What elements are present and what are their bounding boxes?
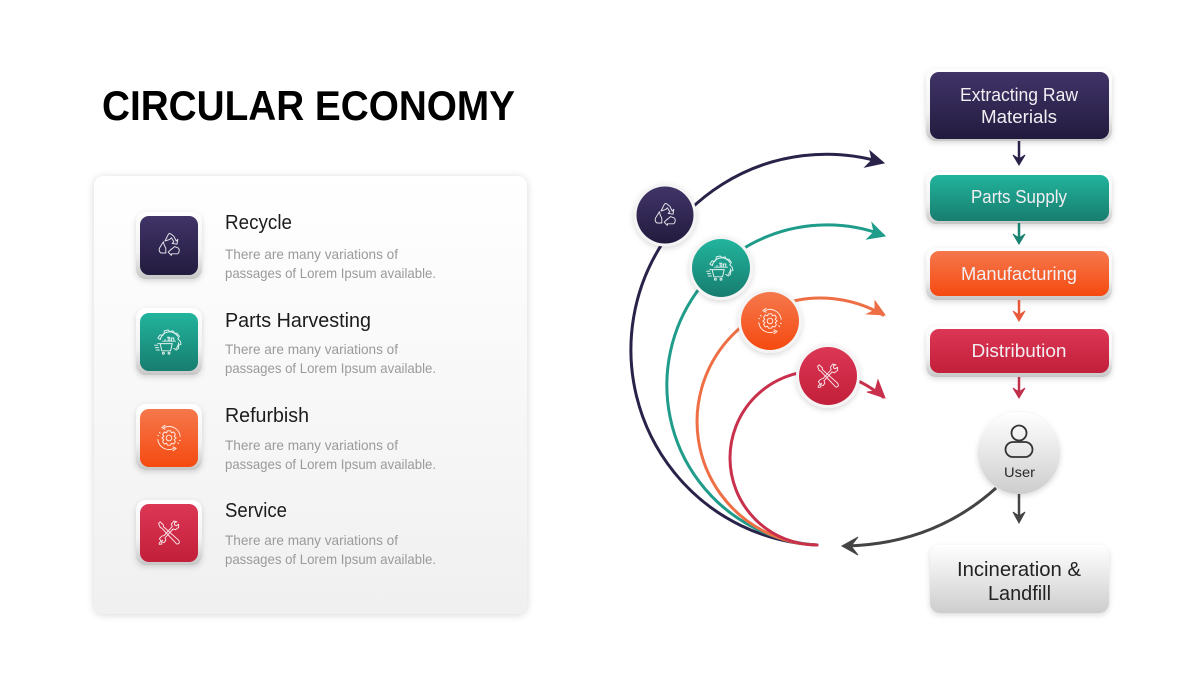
arrow: user to landfill xyxy=(1013,494,1025,523)
legend item: Recycle xyxy=(136,212,436,281)
legend item: Refurbish xyxy=(136,404,436,472)
flow box: Incineration and Landfill: Landfill xyxy=(988,583,1051,605)
flow box: Incineration and Landfill: Incineration & xyxy=(957,559,1082,581)
legend item: Parts Harvesting xyxy=(136,308,436,376)
arrow: parts supply to manufacturing xyxy=(1013,223,1025,244)
arrow: user back to loop xyxy=(842,488,996,555)
legend item: Parts Harvesting: Parts Harvesting xyxy=(225,310,371,332)
legend item: Recycle: Recycle xyxy=(225,212,292,234)
arc: red service loop xyxy=(730,371,885,545)
node: refurbish xyxy=(738,289,802,353)
legend item: Recycle: passages of Lorem Ipsum available. xyxy=(225,265,436,281)
icon: user xyxy=(1006,426,1032,457)
flow box: Distribution xyxy=(926,326,1112,377)
arrow: distribution to user xyxy=(1013,377,1025,398)
legend item: Service xyxy=(136,500,436,567)
user node xyxy=(978,412,1060,494)
flow box: Parts Supply xyxy=(926,172,1112,224)
flow box: Manufacturing: Manufacturing xyxy=(961,264,1077,284)
legend item: Refurbish: There are many variations of xyxy=(225,437,398,453)
legend item: Service: passages of Lorem Ipsum available. xyxy=(225,551,436,567)
flow box: Incineration and Landfill xyxy=(930,545,1109,613)
flow box: Extracting Raw Materials: Extracting Raw xyxy=(960,85,1079,105)
node: service xyxy=(796,344,860,408)
arrow: raw materials to parts supply xyxy=(1013,141,1025,165)
title: CIRCULAR ECONOMY xyxy=(102,82,515,129)
legend item: Refurbish: passages of Lorem Ipsum available. xyxy=(225,456,436,472)
legend item: Refurbish: Refurbish xyxy=(225,405,309,427)
legend item: Service: Service xyxy=(225,500,287,522)
flow box: Extracting Raw Materials xyxy=(926,69,1112,141)
flow box: Parts Supply: Parts Supply xyxy=(971,187,1067,207)
user node: User xyxy=(1004,464,1035,480)
flow box: Distribution: Distribution xyxy=(972,341,1066,361)
legend item: Service: There are many variations of xyxy=(225,532,398,548)
panel: legend xyxy=(94,176,527,614)
node: parts harvesting xyxy=(689,236,753,300)
flow box: Manufacturing xyxy=(926,248,1112,300)
arc: navy recycle loop xyxy=(631,151,884,545)
arrow: manufacturing to distribution xyxy=(1013,300,1025,321)
arc: orange refurbish loop xyxy=(697,298,885,545)
arc: teal parts loop xyxy=(667,223,885,545)
legend item: Parts Harvesting: passages of Lorem Ipsum available. xyxy=(225,360,436,376)
flow box: Extracting Raw Materials: Materials xyxy=(981,107,1057,127)
legend item: Recycle: There are many variations of xyxy=(225,246,398,262)
node: recycle xyxy=(634,184,696,246)
legend item: Parts Harvesting: There are many variations of xyxy=(225,341,398,357)
